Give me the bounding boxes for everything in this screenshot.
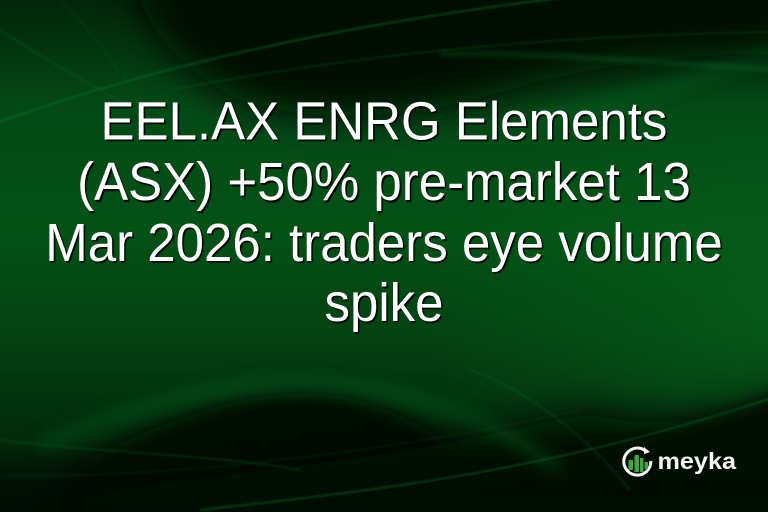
title: (ASX) +50% pre-market 13 [77,152,691,212]
dark lower hump [40,393,530,512]
icon: ring with bars [624,447,651,475]
title: spike [324,273,444,333]
dark upper swoosh [130,0,768,116]
logo: meyka [622,446,736,477]
title [45,91,723,334]
title: Mar 2026: traders eye volume [45,212,723,272]
dark lower band [0,400,768,512]
title: EEL.AX ENRG Elements [101,91,667,151]
wordmark: meyka [658,448,736,474]
